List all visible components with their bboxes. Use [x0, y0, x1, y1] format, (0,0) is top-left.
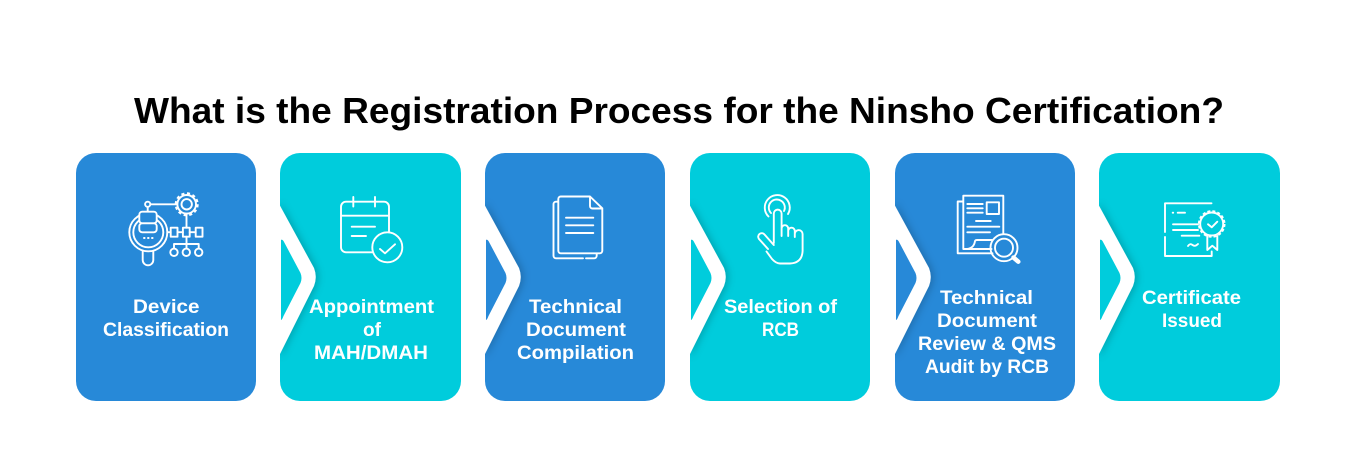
icon: document with magnifier	[958, 196, 1018, 262]
title: What is the Registration Process for the Ninsho Certification?	[134, 90, 1224, 131]
label: Certificate Issued: Certificate	[1142, 287, 1241, 309]
label: Device Classification	[103, 296, 229, 341]
label: Technical Document Review and QMS Audit by RCB: Technical	[940, 287, 1033, 309]
icon: calendar with check	[341, 197, 402, 262]
label: Technical Document Compilation: Compilation	[517, 342, 634, 364]
panel: Selection of RCB	[688, 153, 870, 401]
icon: finger tap	[758, 195, 803, 264]
label: Technical Document Compilation: Document	[526, 319, 627, 341]
label: Appointment of MAH/DMAH: Appointment	[309, 296, 435, 318]
label: Technical Document Review and QMS Audit by RCB: Document	[937, 310, 1038, 332]
label: Appointment of MAH/DMAH: MAH/DMAH	[314, 342, 428, 364]
chevron arrow	[483, 202, 521, 358]
panel: Device Classification	[76, 153, 256, 401]
label: Technical Document Review and QMS Audit by RCB: Audit by RCB	[925, 356, 1049, 378]
icon: certificate with badge	[1165, 203, 1224, 256]
label: Device Classification: Classification	[103, 319, 229, 341]
icon: magnifier with flowchart and gear	[129, 194, 202, 265]
label: Appointment of MAH/DMAH: of	[363, 319, 381, 341]
label: Technical Document Review and QMS Audit by RCB: Review & QMS	[918, 333, 1056, 355]
label: Selection of RCB: RCB	[762, 319, 799, 341]
chevron arrow	[893, 202, 931, 358]
label: Selection of RCB: Selection of	[724, 296, 838, 318]
label: Device Classification: Device	[133, 296, 200, 318]
panel: Technical Document Review and QMS Audit by RCB	[893, 153, 1075, 401]
label: Technical Document Review and QMS Audit by RCB	[918, 287, 1056, 378]
label: Certificate Issued	[1142, 287, 1241, 332]
label: Technical Document Compilation: Technical	[529, 296, 622, 318]
chevron arrow	[1097, 202, 1135, 358]
label: Appointment of MAH/DMAH	[309, 296, 435, 364]
panel: Certificate Issued	[1097, 153, 1280, 401]
icon: documents	[554, 196, 602, 258]
panel: Appointment of MAH/DMAH	[278, 153, 461, 401]
label: Technical Document Compilation	[517, 296, 634, 364]
label: Certificate Issued: Issued	[1162, 310, 1222, 332]
label: Selection of RCB	[724, 296, 838, 341]
chevron arrow	[278, 202, 316, 358]
panel: Technical Document Compilation	[483, 153, 665, 401]
chevron arrow	[688, 202, 726, 358]
